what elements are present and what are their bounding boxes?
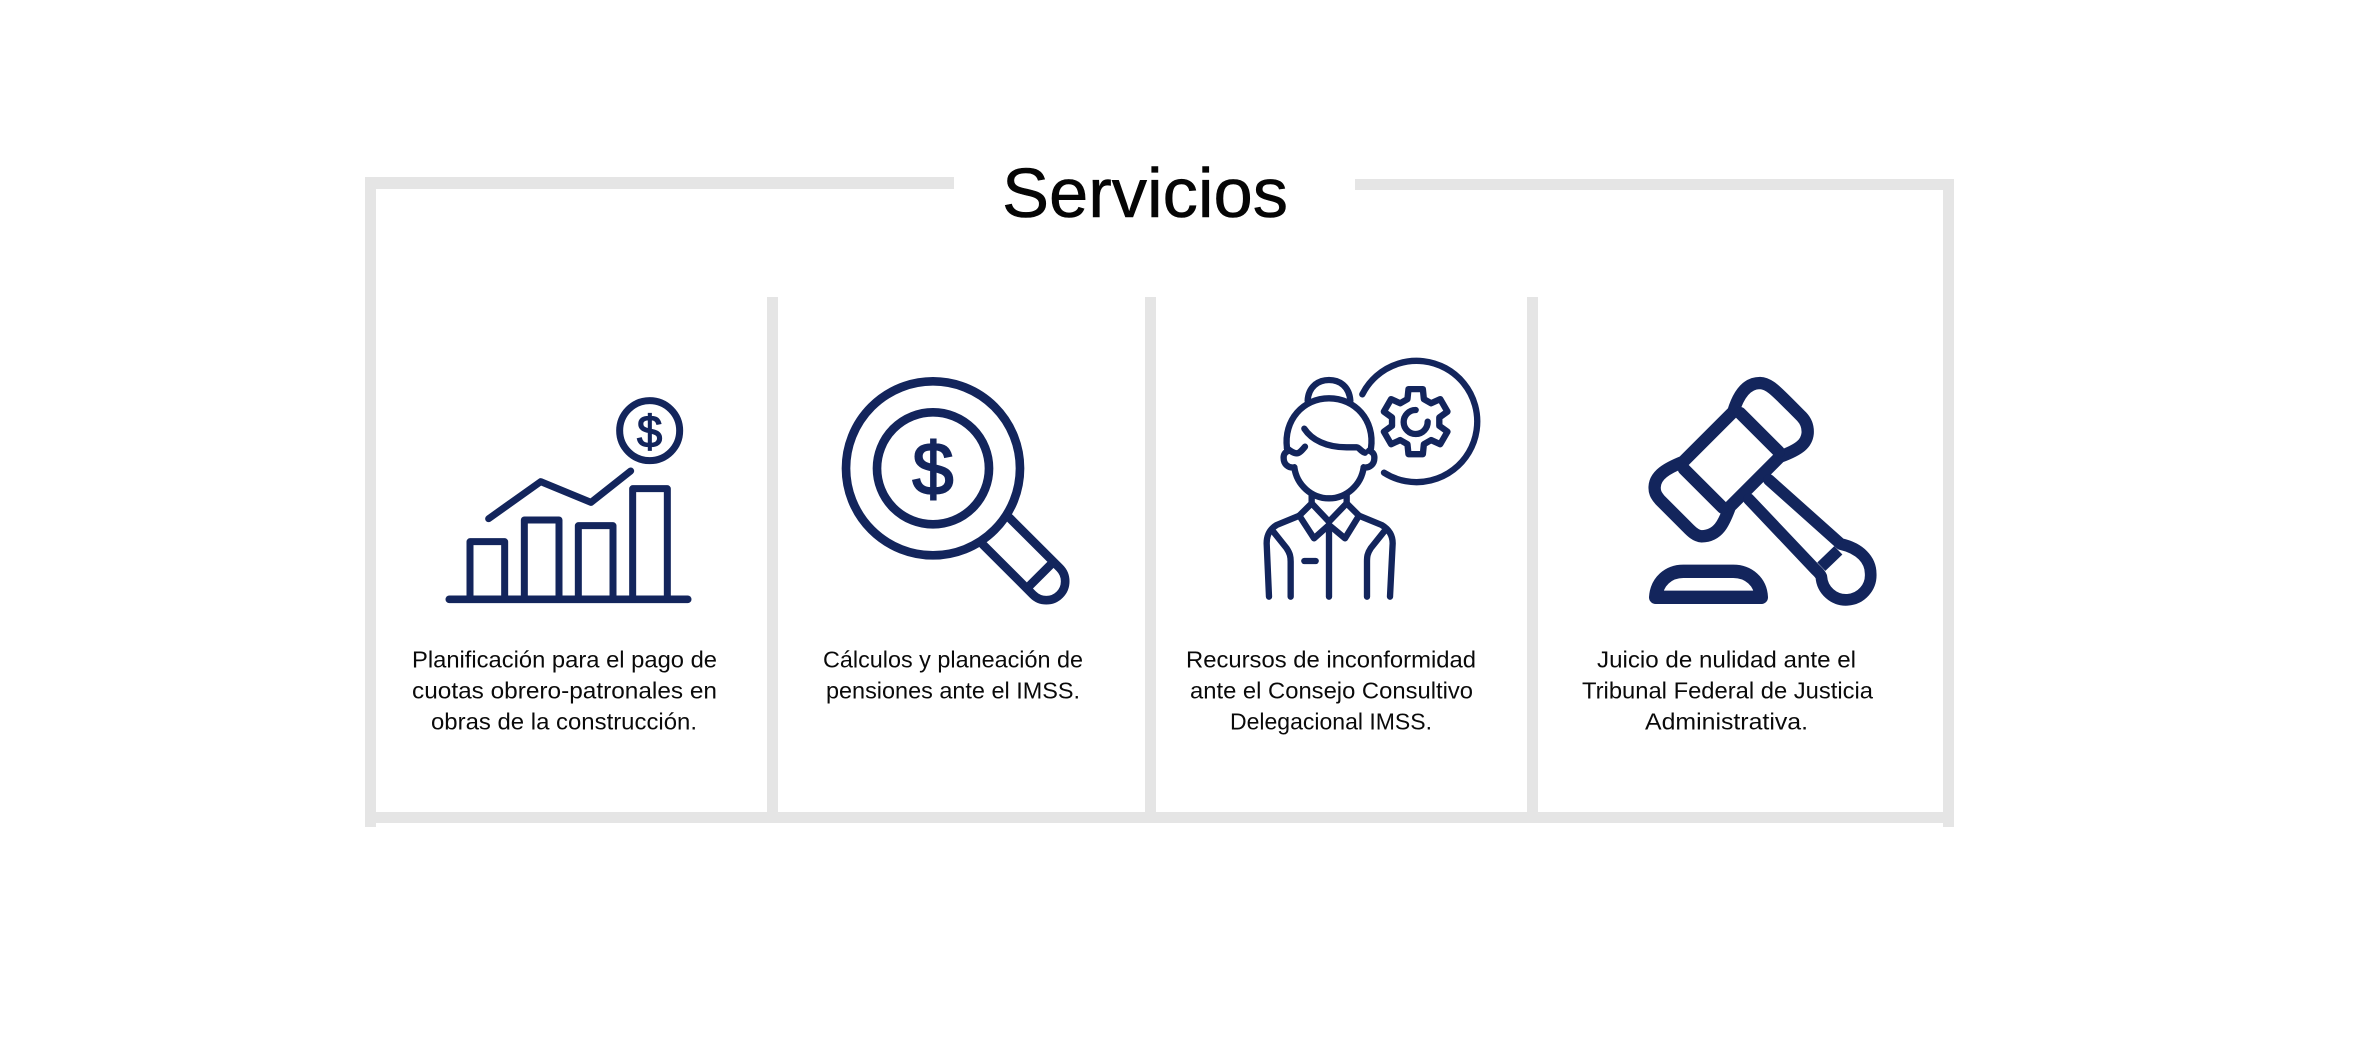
text: planificación description: obras de la construcción.	[431, 708, 697, 734]
text: planificación description: cuotas obrero-patronales en	[412, 678, 717, 704]
text: planificación description: Planificación para el pago de	[412, 646, 717, 672]
frame: outer border with column dividers	[365, 177, 1954, 827]
text: recursos description	[1186, 646, 1476, 734]
text: juicio description	[1582, 646, 1874, 734]
panel: juicio	[1582, 383, 1874, 734]
icon: person with gear	[1267, 361, 1477, 597]
text: cálculos description: pensiones ante el IMSS.	[826, 678, 1080, 704]
text: cálculos description	[823, 646, 1083, 704]
panel: recursos	[1186, 361, 1477, 734]
icon: magnifying glass with dollar: $	[912, 428, 954, 511]
icon: bar chart with dollar coin: $	[637, 406, 662, 457]
text: planificación description	[412, 646, 717, 734]
text: recursos description: Recursos de inconformidad	[1186, 646, 1476, 672]
text: recursos description: ante el Consejo Consultivo	[1190, 678, 1473, 704]
panel: cálculos	[823, 381, 1083, 704]
text: juicio description: Juicio de nulidad ante el	[1597, 646, 1856, 672]
icon: gavel	[1655, 383, 1871, 600]
text: juicio description: Administrativa.	[1645, 708, 1808, 734]
icon: magnifying glass with dollar	[846, 381, 1065, 600]
title: Servicios	[1002, 154, 1288, 232]
text: recursos description: Delegacional IMSS.	[1230, 708, 1432, 734]
icon: bar chart with dollar coin	[449, 401, 688, 599]
panel: planificación	[412, 401, 717, 734]
text: juicio description: Tribunal Federal de Justicia	[1582, 678, 1874, 704]
text: cálculos description: Cálculos y planeación de	[823, 646, 1083, 672]
